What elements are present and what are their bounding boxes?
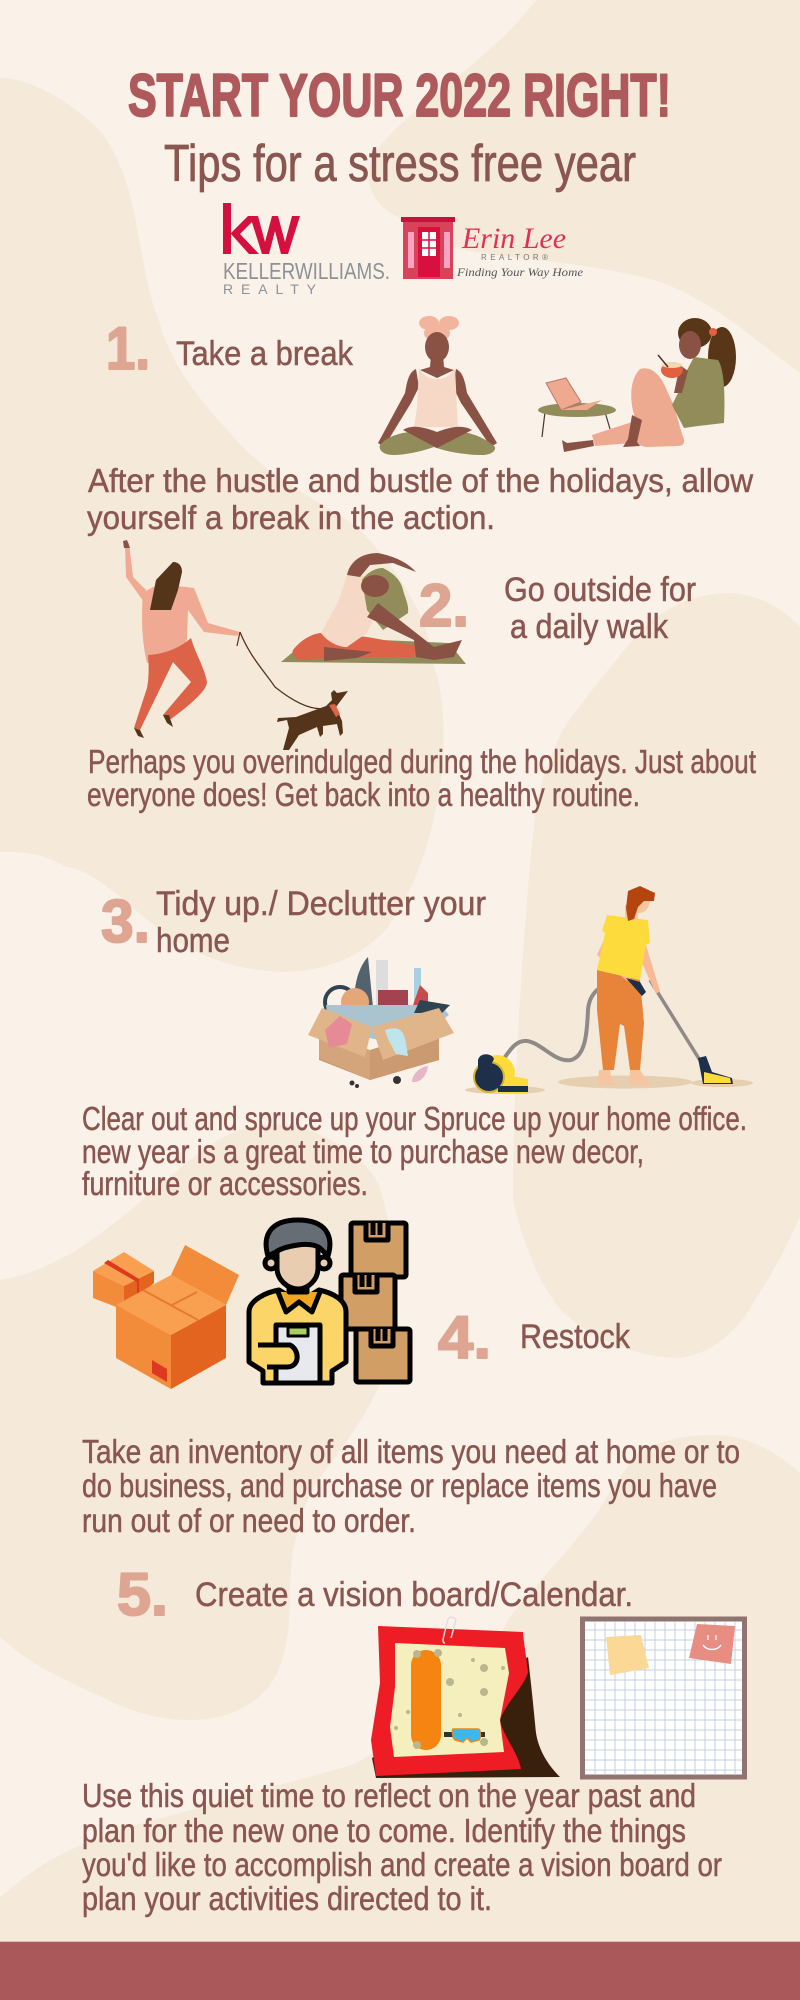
step 5 text: [82, 1777, 722, 1917]
logo: Keller Williams: KELLERWILLIAMS.: [223, 258, 390, 284]
step 2 heading: a daily walk: [510, 608, 669, 646]
illustration: stretching woman: [281, 553, 466, 664]
step 3 text: [82, 1100, 747, 1202]
illustration: girl with laptop: [538, 318, 736, 452]
step 3 heading: [156, 885, 486, 960]
logo: Keller Williams: REALTY: [223, 281, 317, 297]
illustration: delivery man with stacked parcels: [249, 1220, 410, 1383]
illustration: notice board: [582, 1619, 744, 1777]
illustration: meditating woman: [378, 316, 497, 455]
step 4 heading: Restock: [520, 1318, 631, 1356]
step 4 number: 4.: [438, 1304, 491, 1371]
illustration: orange boxes: [93, 1245, 239, 1389]
step 5 heading: Create a vision board/Calendar.: [195, 1576, 633, 1614]
step 5 text: plan for the new one to come. Identify the things: [82, 1812, 686, 1849]
step 3 number: 3.: [101, 888, 150, 955]
step 5 number: 5.: [117, 1561, 168, 1628]
step 1 text: yourself a break in the action.: [87, 499, 495, 536]
step 3 text: new year is a great time to purchase new decor,: [82, 1133, 644, 1170]
illustration: calendar: [371, 1617, 560, 1778]
illustration: woman walking dog: [123, 540, 327, 738]
step 5 text: plan your activities directed to it.: [82, 1880, 492, 1917]
logo: Erin Lee Realtor: Finding Your Way Home: [456, 265, 584, 279]
step 5 text: Use this quiet time to reflect on the year past and: [82, 1777, 696, 1814]
step 4 text: run out of or need to order.: [82, 1502, 416, 1539]
step 1 number: 1.: [106, 315, 150, 382]
logo: Erin Lee Realtor: REALTOR®: [481, 253, 548, 262]
logo: Erin Lee Realtor: Erin Lee: [461, 222, 566, 255]
step 2 number: 2.: [419, 572, 469, 639]
step 1 heading: Take a break: [176, 335, 354, 373]
step 1 text: After the hustle and bustle of the holidays, allow: [88, 462, 753, 499]
step 1 text: [87, 462, 753, 536]
step 2 heading: [504, 571, 696, 646]
illustration: man vacuuming: [465, 886, 753, 1094]
step 2 text: everyone does! Get back into a healthy routine.: [87, 776, 640, 813]
step 3 heading: Tidy up./ Declutter your: [156, 885, 486, 923]
subtitle: Tips for a stress free year: [164, 135, 636, 193]
illustration: dog: [277, 690, 348, 750]
step 3 text: furniture or accessories.: [82, 1165, 368, 1202]
step 4 text: [82, 1433, 740, 1539]
step 3 heading: home: [156, 922, 230, 960]
step 2 heading: Go outside for: [504, 571, 696, 609]
step 2 text: [87, 743, 756, 813]
logo: Erin Lee Realtor: [401, 217, 584, 279]
illustration: clutter box: [308, 957, 454, 1088]
footer bar: [0, 1941, 800, 2000]
logo: Keller Williams: [223, 203, 390, 297]
